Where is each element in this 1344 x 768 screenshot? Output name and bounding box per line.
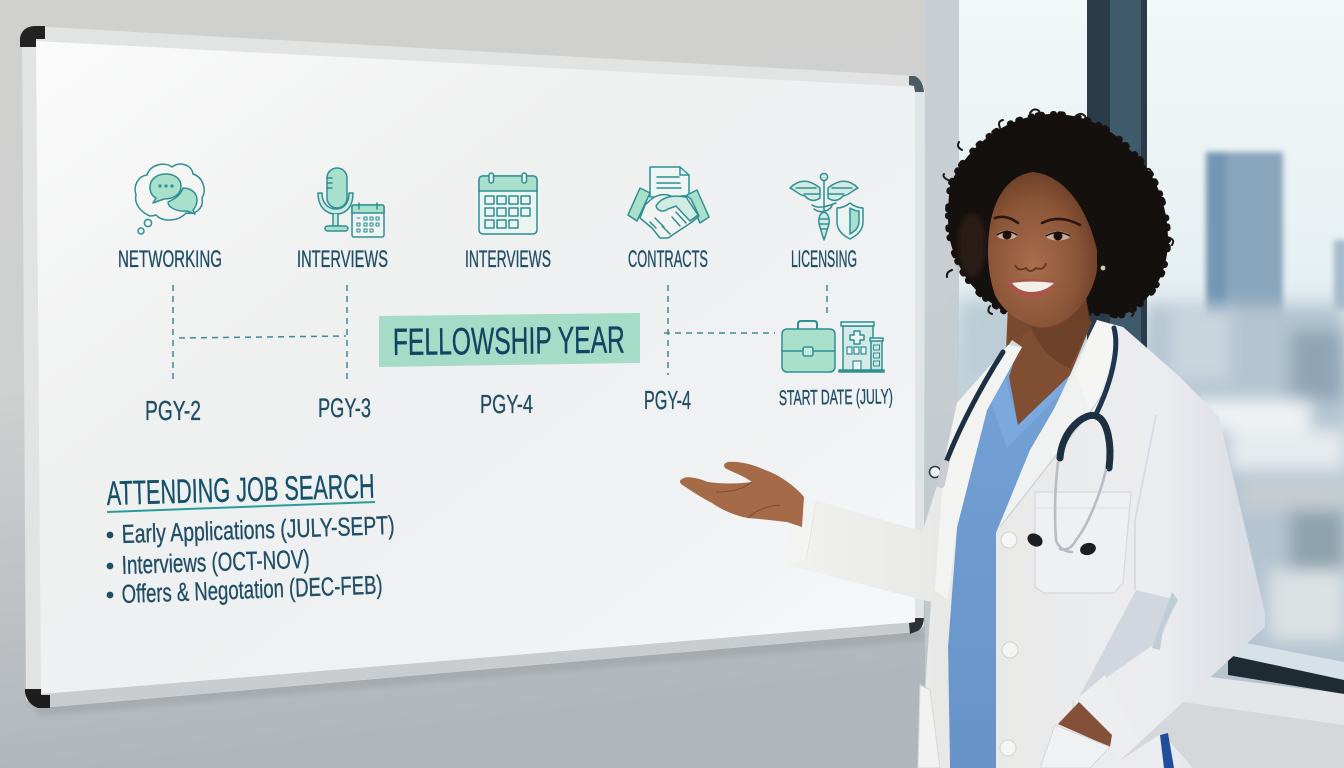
label: Interviews first: INTERVIEWS [297, 246, 388, 273]
board writing surface [36, 41, 915, 694]
face [988, 172, 1097, 327]
bullet list: Interviews (OCT-NOV) [121, 544, 310, 580]
banner: fellowship year [379, 313, 640, 367]
stethoscope chest piece [930, 459, 950, 489]
coat buttons [1000, 532, 1018, 756]
window with blurred city view [959, 0, 1344, 700]
right cuff [1079, 675, 1140, 762]
right collar [1075, 320, 1118, 412]
coat side stripe [1160, 733, 1174, 768]
scrubs top [948, 347, 1070, 768]
wall background [0, 0, 960, 768]
right cuff [687, 190, 709, 223]
board frame [22, 26, 924, 708]
frame corner top left [20, 26, 45, 47]
bullet list: Early Applications (JULY-SEPT) [121, 510, 395, 549]
label: Networking: NETWORKING [118, 246, 222, 273]
heading: attending job search [106, 468, 375, 513]
pointing hand [680, 462, 804, 527]
board shadow [26, 628, 926, 716]
right lapel [996, 373, 1090, 533]
label: PGY-2: PGY-2 [145, 395, 201, 426]
earring [1101, 266, 1105, 270]
eyes [997, 230, 1070, 240]
clasped hands [640, 195, 699, 238]
icon: caduceus and shield [790, 173, 863, 240]
sleeve cuff [784, 497, 816, 565]
left side pocket [918, 685, 940, 768]
icon: networking chat cloud [135, 164, 204, 234]
chest pocket [1035, 492, 1131, 593]
speech bubble back [168, 188, 197, 214]
timeline dashed connectors [173, 285, 827, 384]
label: PGY-4 contracts: PGY-4 [644, 385, 691, 415]
coat seam lines [1072, 700, 1074, 768]
whiteboard [20, 26, 926, 716]
lab coat right part and arm [996, 320, 1265, 768]
eyebrows [995, 217, 1080, 225]
neck [1006, 290, 1090, 428]
pocket hand [1058, 702, 1112, 747]
coat shadow under arm [1079, 590, 1177, 697]
label: PGY-3: PGY-3 [318, 393, 371, 423]
wall panel beside window [925, 0, 960, 768]
label: Interviews second: INTERVIEWS [465, 246, 551, 273]
shield [837, 203, 863, 239]
heading underline [107, 502, 375, 512]
scrub collar V [991, 372, 1070, 448]
hair flyaway curls [944, 109, 1173, 316]
heading: attending job search: ATTENDING JOB SEARCH [106, 468, 375, 513]
frame corner bottom right [909, 618, 924, 634]
left cuff [628, 188, 650, 221]
lower pocket [1040, 725, 1110, 768]
small calendar [352, 205, 384, 237]
bullet list: Offers & Negotation (DEC-FEB) [121, 569, 383, 609]
stethoscope ear tips [1025, 531, 1097, 557]
hair highlight [958, 213, 986, 277]
mouth [1007, 279, 1058, 299]
skin V [1009, 315, 1092, 425]
doctor [680, 109, 1265, 768]
label: Licensing: LICENSING [791, 246, 857, 273]
banner: fellowship year: FELLOWSHIP YEAR [393, 320, 625, 364]
hair [944, 109, 1173, 316]
speech bubble front [150, 174, 181, 203]
left collar [935, 345, 1022, 600]
icon: hospital building [839, 322, 884, 372]
lab coat left part and sleeve [784, 340, 1022, 768]
bullet list [107, 510, 395, 609]
icon: calendar [479, 173, 537, 234]
skyline tower [1206, 152, 1344, 332]
frame corner bottom left [25, 689, 50, 708]
stethoscope [945, 328, 1116, 552]
window gap under arm [1152, 592, 1178, 650]
contract document [650, 167, 689, 197]
nose [1015, 263, 1046, 271]
neck shadow [1030, 300, 1092, 368]
window sill [960, 640, 1344, 768]
frame corner top right [909, 76, 924, 92]
window frame [1087, 0, 1147, 350]
icon: microphone and calendar [318, 168, 384, 237]
label: Contracts: CONTRACTS [628, 246, 708, 273]
label: PGY-4 fellowship: PGY-4 [480, 389, 533, 419]
icon: contract handshake [628, 167, 709, 238]
blurred city blocks [1147, 305, 1344, 655]
icon: briefcase [782, 321, 835, 372]
label: start date: START DATE (JULY) [779, 385, 893, 410]
